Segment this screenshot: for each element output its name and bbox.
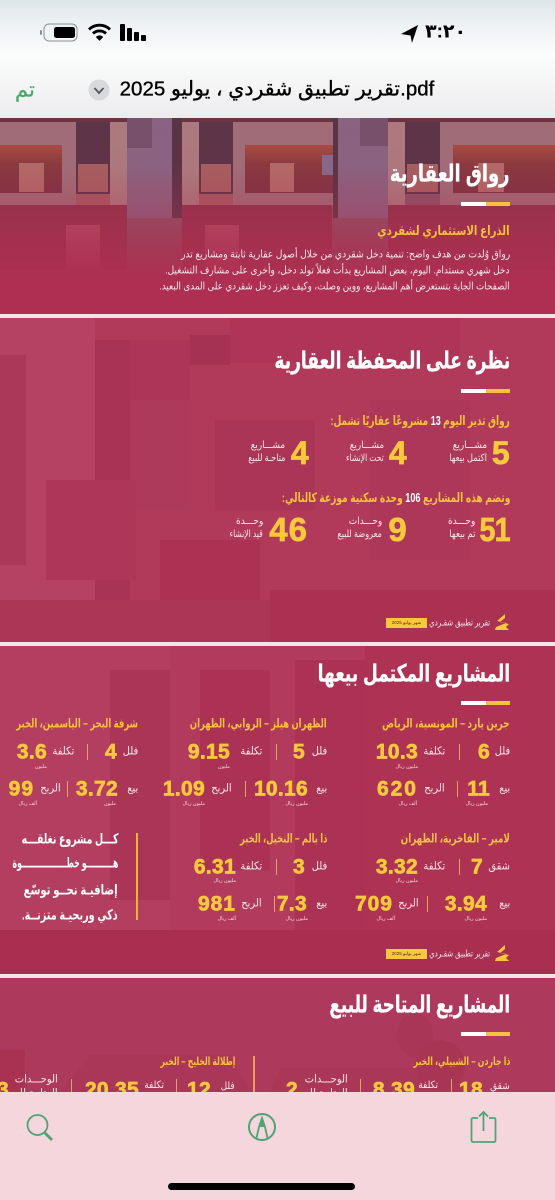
heading underline [461, 202, 510, 206]
project card: Lamir: شقق [488, 860, 510, 872]
project card: Dhahran Hills [163, 716, 327, 807]
stat: 9 units for sale: 9 [388, 511, 407, 548]
project card: Sea Balcony: بيع [127, 782, 138, 794]
project card: Lamir [355, 832, 510, 922]
stat: 5 completed projects: مشـــاريع [453, 440, 487, 451]
icon: wifi [89, 25, 110, 40]
stat: 4 under construction: تحت الإنشاء [346, 453, 384, 464]
project card: Gulf View: إطلالة الخليج – الخبر [160, 1056, 235, 1068]
project card: Lamir: الربح [399, 897, 419, 909]
project card: The Palm: 981 [198, 892, 236, 915]
project card: The Palm: 3 [293, 855, 305, 878]
project card: Sea Balcony: الربح [41, 782, 61, 794]
project card: Dhahran Hills: 1.09 [163, 777, 205, 800]
icon: chevron button [88, 80, 110, 100]
project card: The Palm: ألف ريال [218, 916, 236, 922]
subheading: 106 units: وتضم هذه المشاريع 106 وحدة سكنية موزعة كالتالي: [282, 490, 510, 505]
footer: report label and date [386, 945, 509, 961]
subheading: الذراع الاستثماري لشقردي [378, 223, 510, 238]
icon: search [26, 1114, 53, 1141]
stat: 46 units under construction [230, 511, 308, 548]
icon: logo [495, 614, 509, 630]
icon: battery [40, 24, 77, 41]
callout: every project closed: إضافيـة نحــو توسّع [24, 882, 118, 898]
project card: Green Yard: 620 [377, 777, 418, 800]
stat: 4 under construction: مشـــاريع [350, 440, 384, 451]
project card: Gulf View: فلل [221, 1081, 235, 1092]
stat: 4 available for sale: متاحـة للبيع [248, 453, 285, 464]
callout: every project closed: هــــــــــو خطـــــــــــــــــوة [12, 855, 118, 871]
status bar time: ٣:٢٠ [425, 22, 466, 43]
top navigation bar [0, 0, 555, 118]
project card: Sea Balcony: 3.6 [17, 740, 47, 763]
callout: every project closed: ذكي وربحيـة متزنــة. [22, 907, 118, 923]
project card: Green Yard [376, 716, 510, 807]
project card: Green Yard: مليون ريال [396, 764, 418, 770]
footer: report label and date: شهر يوليو 2025 [392, 620, 421, 625]
project card: Sea Balcony: ألف ريال [19, 801, 37, 807]
white separators between pages [0, 314, 555, 318]
project card: Green Yard: تكلفة [423, 745, 445, 757]
project card: Lamir: 7 [471, 855, 483, 878]
project card: Dhahran Hills: مليون ريال [183, 801, 205, 807]
project card: Green Yard: 10.3 [376, 740, 418, 763]
project card: The Palm [194, 832, 327, 922]
stat: 51 units sold [448, 511, 510, 548]
building photo background [0, 118, 555, 254]
done button: تم [15, 78, 35, 101]
intro body text: رواق وُلدت من هدف واضح: تنمية دخل شقردي من خلال أصول عقارية ثابتة ومشاريع تدر [181, 249, 510, 261]
project card: Gulf View [0, 1056, 235, 1092]
icon: share [470, 1110, 496, 1143]
stat: 4 available for sale: مشـــاريع [251, 440, 285, 451]
panel: portfolio overview [0, 318, 555, 642]
heading: rawaq real estate: رواق العقارية [390, 161, 510, 188]
stat: 4 under construction: 4 [389, 435, 407, 471]
project card: The Palm: تكلفة [240, 860, 262, 872]
stat: 51 units sold: وحـــدة [448, 516, 475, 527]
project card: Dhahran Hills: مليون ريال [286, 801, 308, 807]
project card: Lamir: 3.32 [376, 855, 418, 878]
project card: The Palm: فلل [311, 860, 327, 872]
callout: every project closed [12, 831, 138, 923]
project card: Lamir: ألف ريال [377, 916, 395, 922]
project card: Dhahran Hills: فلل [311, 745, 327, 757]
project card: Green Yard: فلل [494, 745, 510, 757]
stat: 4 available for sale: 4 [291, 435, 309, 471]
project card: Green Yard: الربح [425, 782, 445, 794]
stat: 46 units under construction: وحـــدة [236, 516, 263, 527]
project card: Lamir: تكلفة [423, 860, 445, 872]
project card: Lamir: 3.94 [445, 892, 487, 915]
project card: Sea Balcony: 4 [105, 740, 117, 763]
project card: Green Yard: 11 [467, 777, 490, 800]
project card: The Garden: شقق [490, 1081, 510, 1092]
project card: Sea Balcony: مليون [104, 801, 116, 807]
faded building background [95, 335, 555, 642]
project card: The Palm: بيع [316, 897, 327, 909]
faded building background [0, 646, 170, 930]
project card: The Palm: ذا بالم – النخيل، الخبر [240, 832, 327, 846]
stat: 9 units for sale [338, 511, 407, 548]
panel: projects available for sale [0, 978, 555, 1092]
icon: cellular signal [120, 24, 146, 41]
heading: portfolio overview: نظرة على المحفظة العقارية [274, 348, 510, 375]
project card: Dhahran Hills: بيع [316, 782, 327, 794]
stat: 5 completed projects: 5 [492, 435, 510, 471]
project card: The Palm: مليون ريال [214, 878, 236, 884]
heading: completed projects: المشاريع المكتمل بيعها [318, 661, 510, 688]
divider between projects [253, 1056, 255, 1092]
project card: Sea Balcony: مليون [35, 764, 47, 770]
project card: The Palm: 6.31 [194, 855, 236, 878]
home indicator [168, 1183, 355, 1190]
project card: Sea Balcony: 3.72 [76, 777, 118, 800]
project card: The Garden: الوحـــدات [305, 1073, 348, 1085]
project card: Sea Balcony: تكلفة [52, 745, 74, 757]
stat: 9 units for sale: وحـــدات [348, 516, 382, 527]
intro body text [159, 247, 510, 293]
stat: 46 units under construction: قيد الإنشاء [230, 529, 263, 540]
footer: report label and date: تقرير تطبيق شقـردي [429, 949, 490, 959]
project card: Lamir: 709 [355, 892, 393, 915]
faded building background [0, 1050, 25, 1092]
project card: Dhahran Hills: 10.16 [254, 777, 308, 800]
stat: 9 units for sale: معروضة للبيع [338, 529, 382, 540]
status bar icons [40, 24, 418, 43]
project card: Sea Balcony: 99 [9, 777, 34, 800]
project card: Lamir: مليون ريال [396, 878, 418, 884]
project card: Lamir: مليون ريال [465, 916, 487, 922]
project card: Dhahran Hills: 9.15 [188, 740, 230, 763]
document title: 2025 تقرير تطبيق شقردي ، يوليو.pdf [120, 78, 434, 101]
project card: The Garden: تكلفة [418, 1080, 438, 1091]
heading underline [461, 389, 510, 393]
icon: logo [495, 945, 509, 961]
stat: 51 units sold: تم بيعها [449, 529, 475, 540]
footer: report label and date [386, 614, 509, 630]
project card: The Palm: مليون ريال [286, 916, 308, 922]
callout: every project closed: كـــل مشروع نغلقـــه [21, 831, 118, 847]
footer: report label and date: تقرير تطبيق شقـردي [429, 618, 490, 628]
icon: location arrow [401, 25, 418, 43]
stat: 51 units sold: 51 [480, 511, 510, 548]
stat: 5 completed projects: اكتمل بيعها [449, 453, 487, 464]
project card: The Garden [286, 1056, 510, 1092]
project card: Sea Balcony: شرفة البحر – الياسمين، الخبر [16, 716, 138, 730]
project card: Gulf View: الوحـــدات [15, 1073, 58, 1085]
project card: The Palm: الربح [242, 897, 262, 909]
intro body text: الصفحات الجاية بتستعرض أهم المشاريع، ووين وصلت، وكيف تعزز دخل شقردي على المدى البعيد. [159, 281, 510, 293]
project card: Gulf View: تكلفة [144, 1080, 164, 1091]
project card: Green Yard: 6 [478, 740, 490, 763]
project card: Sea Balcony: فلل [122, 745, 138, 757]
project card: Green Yard: ألف ريال [399, 801, 417, 807]
intro body text: دخل شهري مستدام. اليوم، بعض المشاريع بدأت فعلاً تولد دخل، وأخرى على مشارف التشغيل. [166, 265, 510, 277]
project card: Green Yard: جرين يارد – المونسية، الرياض [382, 716, 510, 730]
project card: Lamir: بيع [499, 897, 510, 909]
project card: Dhahran Hills: الظهران هيلز – الروابي، الظهران [190, 716, 327, 730]
subheading: 13 projects: رواق تدير اليوم 13 مشروعًا عقاريًا تشمل: [331, 413, 510, 428]
icon: markup pen [248, 1113, 276, 1141]
bottom toolbar [0, 1092, 555, 1200]
project card: Dhahran Hills: 5 [293, 740, 305, 763]
stat: 5 completed projects [449, 435, 510, 471]
heading: available projects: المشاريع المتاحة للبيع [329, 992, 510, 1019]
project card: Lamir: لامير – الفاخرية، الظهران [401, 832, 510, 846]
project card: Green Yard: مليون ريال [466, 801, 488, 807]
project card: Sea Balcony [9, 716, 138, 807]
project card: The Garden: ذا جاردن – الشبيلي، الخبر [413, 1056, 510, 1068]
heading underline [461, 1032, 510, 1036]
project card: The Palm: 7.3 [277, 892, 307, 915]
stat: 46 units under construction: 46 [269, 511, 308, 548]
project card: Dhahran Hills: مليون [218, 764, 230, 770]
project card: Green Yard: بيع [499, 782, 510, 794]
project card: Dhahran Hills: الربح [212, 782, 232, 794]
heading underline [461, 701, 510, 705]
panel: rawaq real estate intro [0, 118, 555, 314]
stat: 4 available for sale [248, 435, 309, 471]
stat: 4 under construction [346, 435, 407, 471]
footer: report label and date: شهر يوليو 2025 [392, 951, 421, 956]
project card: Dhahran Hills: تكلفة [240, 745, 262, 757]
panel: completed projects [0, 646, 555, 974]
